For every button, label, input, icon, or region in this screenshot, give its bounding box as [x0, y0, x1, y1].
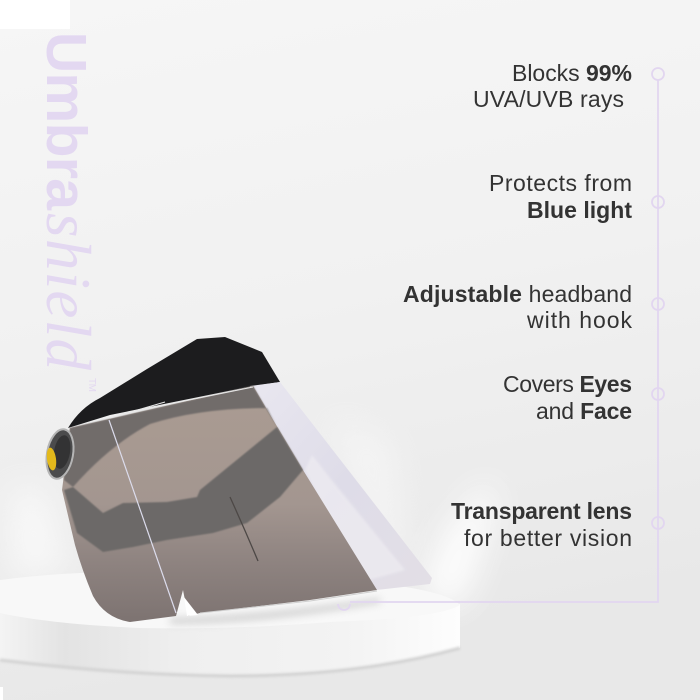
upper dark band: [64, 386, 277, 487]
feature: adjustable headband: with hook: [526, 307, 632, 333]
lens bottom rim: [200, 591, 377, 613]
feature: blocks UV rays: Blocks 99%: [512, 60, 632, 86]
brand name: Umbrashield: [33, 32, 103, 392]
adjuster knob: [43, 427, 77, 481]
brand name: Umbrashield: TM: [86, 378, 97, 392]
feature: blocks UV rays: UVA/UVB rays: [473, 86, 624, 112]
visor black headband cap: [68, 337, 280, 428]
tinted lens: [62, 386, 377, 622]
clear lens highlight: [305, 455, 405, 582]
feature: covers eyes and face: and Face: [536, 398, 632, 424]
brand name: Umbrashield: Umbra: [34, 32, 98, 211]
feature: transparent lens: [451, 498, 632, 551]
scratch mark: [230, 497, 258, 561]
clear lens edge: [250, 382, 432, 590]
feature: blue light: Protects from: [489, 170, 632, 196]
feature: adjustable headband: [403, 281, 632, 333]
feature: blue light: [489, 170, 632, 223]
feature: blue light: Blue light: [527, 197, 632, 223]
product: sun visor: [43, 337, 432, 622]
feature: adjustable headband: Adjustable headband: [403, 281, 632, 307]
feature: covers eyes and face: Covers Eyes: [503, 371, 632, 397]
lower dark band: [64, 427, 303, 552]
feature: transparent lens: for better vision: [464, 525, 632, 551]
lens seam line: [109, 420, 176, 613]
notch highlight: [184, 597, 198, 616]
feature: blocks UV rays: [473, 60, 632, 112]
lens top highlight: [110, 387, 253, 418]
connector line with marker circles: [338, 68, 664, 607]
display platform: [0, 572, 460, 676]
brand name: Umbrashield: shield: [33, 213, 103, 370]
feature: covers eyes and face: [503, 371, 632, 424]
feature: transparent lens: Transparent lens: [451, 498, 632, 524]
